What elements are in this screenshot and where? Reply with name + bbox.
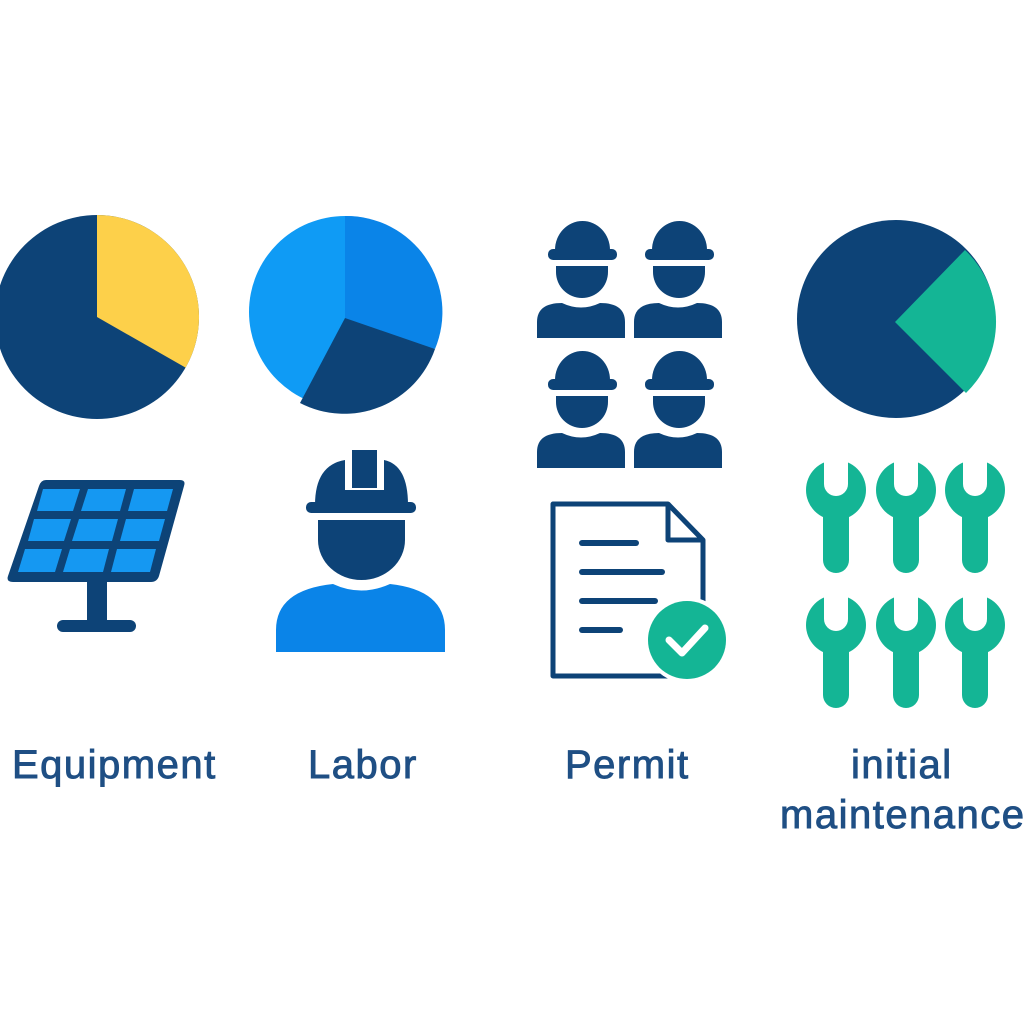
- label: equipment: Equipment: [12, 743, 217, 787]
- icon: wrenches: [806, 457, 1005, 708]
- label: permit: Permit: [565, 743, 690, 787]
- label: labor: Labor: [308, 743, 418, 787]
- icon: permit document: [553, 504, 730, 683]
- pie: equipment: [0, 215, 199, 419]
- icon: workers group: [537, 221, 722, 468]
- icon: solar panel: [8, 480, 184, 632]
- label: initial: initial: [851, 743, 953, 787]
- icon: worker: [276, 450, 445, 652]
- pie: maintenance: [797, 220, 996, 418]
- pie: labor: [249, 216, 442, 414]
- label: maintenance: maintenance: [780, 793, 1024, 837]
